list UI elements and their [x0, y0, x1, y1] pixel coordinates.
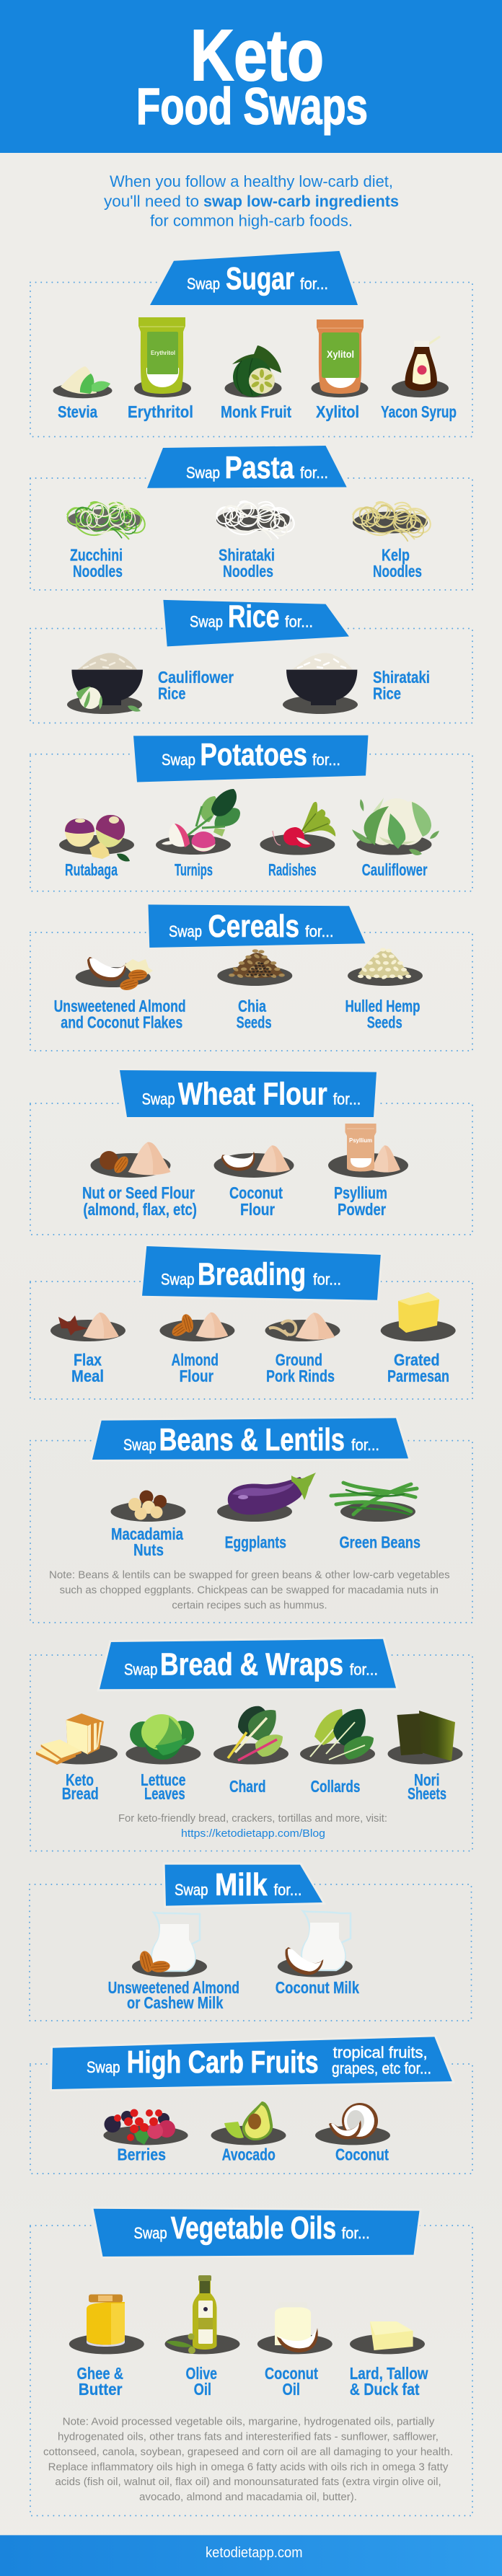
item: shirataki noodles: Shirataki: [219, 546, 275, 565]
item: zucchini noodles: Zucchini: [70, 546, 123, 565]
item: almond or cashew milk: [108, 1913, 239, 2012]
item: lard tallow and duck fat: [350, 2321, 428, 2399]
item: grated parmesan: Grated: [394, 1350, 440, 1369]
item: turnips: Turnips: [175, 860, 213, 879]
item: coconut milk: Coconut Milk: [276, 1978, 359, 1997]
banner: swap high carb fruits: [52, 2037, 452, 2089]
banner: swap rice: [163, 599, 349, 646]
item: nori sheets: Sheets: [408, 1784, 446, 1803]
item: shirataki rice: Shirataki: [373, 668, 430, 687]
item: coconut: [315, 2103, 390, 2164]
item: hulled hemp seeds: Seeds: [367, 1013, 402, 1031]
item: lettuce leaves: Leaves: [144, 1784, 185, 1803]
item: collards: [300, 1709, 375, 1796]
item: macadamia nuts: [111, 1490, 186, 1559]
item: stevia: Stevia: [58, 402, 97, 421]
note: keto friendly bread: https://ketodietapp.com/Blog: [181, 1827, 325, 1840]
intro text: you'll need to: [104, 193, 199, 211]
banner: swap beans and lentils: Beans & Lentils: [159, 1422, 345, 1457]
note: beans and lentils: such as chopped eggplants. Chickpeas can be swapped for macadamia nuts in: [60, 1584, 439, 1597]
panel: sugar: [30, 251, 472, 437]
note: vegetable oils: cottonseed, canola, soybean, grapeseed and corn oil are all damaging to your health.: [43, 2446, 453, 2458]
banner: swap breading: for...: [313, 1271, 341, 1289]
item: keto bread: Keto: [66, 1770, 94, 1789]
item: ground pork rinds: Ground: [276, 1350, 322, 1369]
banner: swap cereals: for...: [305, 922, 333, 940]
item: almond and coconut flakes: and Coconut Flakes: [61, 1013, 182, 1031]
item: grated parmesan: [381, 1292, 456, 1385]
banner: swap milk: Milk: [215, 1867, 268, 1902]
item: nut or seed flour: Nut or Seed Flour: [82, 1183, 195, 1202]
banner: swap milk: Swap: [175, 1881, 208, 1899]
panel: high carb fruits: [30, 2037, 472, 2174]
title: Food Swaps: [136, 79, 368, 136]
item: green beans: Green Beans: [339, 1533, 420, 1552]
item: psyllium powder: [328, 1124, 408, 1219]
item: almond or cashew milk: Unsweetened Almond: [108, 1978, 239, 1997]
banner: swap rice: Rice: [228, 599, 280, 634]
item: hulled hemp seeds: [345, 948, 423, 1031]
banner: swap sugar: Swap: [187, 275, 220, 293]
item: grated parmesan: Parmesan: [387, 1367, 449, 1385]
item: almond flour: Flour: [180, 1367, 213, 1385]
intro text: for common high-carb foods.: [150, 212, 353, 230]
item: coconut flour: Flour: [240, 1200, 275, 1219]
banner: swap high carb fruits: tropical fruits,: [333, 2044, 428, 2062]
item: lettuce leaves: [126, 1714, 201, 1803]
item: shirataki noodles: Noodles: [223, 562, 273, 581]
item: yacon syrup: [381, 337, 457, 421]
item: collards: Collards: [311, 1777, 360, 1796]
item: nori sheets: [388, 1711, 463, 1803]
item: almond and coconut flakes: Unsweetened Almond: [54, 997, 186, 1015]
item: keto bread: Bread: [62, 1784, 99, 1803]
item: ghee and butter: Ghee &: [76, 2364, 123, 2383]
banner: swap potatoes: for...: [312, 751, 340, 769]
item: almond or cashew milk: or Cashew Milk: [127, 1993, 224, 2012]
item: berries: [103, 2109, 188, 2164]
banner: swap cereals: Swap: [169, 922, 202, 940]
item: macadamia nuts: Macadamia: [111, 1525, 183, 1543]
note: keto friendly bread: For keto-friendly bread, crackers, tortillas and more, visit:: [118, 1812, 387, 1825]
banner: swap vegetable oils: for...: [342, 2224, 370, 2242]
item: olive oil: Oil: [194, 2380, 211, 2399]
item: nut or seed flour: [82, 1142, 197, 1219]
intro text: swap low-carb ingredients: [203, 193, 399, 211]
item: coconut milk: [276, 1911, 359, 1997]
banner: swap rice: for...: [285, 612, 313, 630]
item: eggplants: [217, 1473, 316, 1552]
item: shirataki rice: [283, 653, 430, 714]
footer: [0, 2535, 502, 2576]
banner: swap vegetable oils: [94, 2209, 420, 2257]
item: ghee and butter: Butter: [79, 2380, 123, 2399]
banner: swap cereals: Cereals: [208, 909, 299, 944]
item: avocado: Avocado: [222, 2145, 276, 2164]
item: chia seeds: Seeds: [237, 1013, 272, 1031]
item: psyllium powder: Psyllium: [334, 1183, 387, 1202]
item: olive oil: Olive: [186, 2364, 217, 2383]
banner: swap pasta: Pasta: [225, 450, 294, 485]
item: almond flour: Almond: [172, 1350, 219, 1369]
footer: ketodietapp.com: [206, 2545, 303, 2561]
item: coconut: Coconut: [335, 2145, 389, 2164]
banner: swap breading: Breading: [198, 1257, 306, 1292]
item: lard tallow and duck fat: Lard, Tallow: [350, 2364, 428, 2383]
item: coconut oil: Coconut: [265, 2364, 318, 2383]
item: chia seeds: Chia: [238, 997, 266, 1015]
item: nori sheets: Nori: [414, 1770, 440, 1789]
item: keto bread: [36, 1713, 118, 1803]
title: Keto: [190, 15, 324, 96]
banner: swap high carb fruits: High Carb Fruits: [127, 2045, 319, 2080]
banner: swap vegetable oils: Vegetable Oils: [171, 2210, 336, 2246]
item: stevia: [53, 366, 113, 421]
banner: swap high carb fruits: Swap: [87, 2058, 120, 2076]
item: almond flour: [159, 1313, 234, 1385]
item: chia seeds: [217, 949, 292, 1031]
note: vegetable oils: Note: Avoid processed vegetable oils, margarine, hydrogenated oils, partially: [63, 2415, 435, 2427]
item: ground pork rinds: Pork Rinds: [266, 1367, 335, 1385]
note: vegetable oils: avocado, almond and macadamia oil, butter).: [139, 2491, 357, 2503]
item: eggplants: Eggplants: [225, 1533, 286, 1552]
banner: swap beans and lentils: for...: [351, 1436, 379, 1454]
note: vegetable oils: [43, 2415, 453, 2503]
panel: vegetable oils: [30, 2209, 472, 2515]
note: vegetable oils: Replace inflammatory oils high in omega 6 fatty acids with oils rich in omega 3 fatty: [48, 2461, 449, 2474]
item: yacon syrup: Yacon Syrup: [381, 402, 457, 421]
banner: swap sugar: Sugar: [226, 261, 294, 296]
item: rutabaga: Rutabaga: [65, 860, 118, 879]
banner: swap breading: Swap: [161, 1271, 195, 1289]
intro text: When you follow a healthy low-carb diet,: [110, 172, 393, 190]
item: coconut flour: [213, 1145, 294, 1219]
panel: breading: [30, 1246, 472, 1399]
banner: swap beans and lentils: [92, 1418, 408, 1460]
item: cauliflower: Cauliflower: [362, 860, 428, 879]
note: keto friendly bread: [118, 1812, 387, 1840]
intro text: [104, 172, 399, 230]
item: radishes: Radishes: [268, 860, 317, 879]
item: xylitol: [312, 319, 368, 421]
item: cauliflower rice: Rice: [158, 684, 186, 702]
banner: swap milk: for...: [274, 1881, 301, 1899]
item: kelp noodles: Noodles: [373, 562, 422, 581]
item: olive oil: [164, 2275, 239, 2399]
banner: swap potatoes: Swap: [162, 751, 195, 769]
item: lettuce leaves: Lettuce: [141, 1770, 186, 1789]
item: zucchini noodles: [67, 498, 145, 581]
header band: [0, 0, 502, 153]
item: chard: Chard: [229, 1777, 265, 1796]
item: flax meal: Meal: [71, 1367, 104, 1385]
item: coconut oil: [257, 2302, 333, 2399]
item: almond and coconut flakes: [54, 957, 186, 1031]
panel: cereals: [30, 904, 472, 1051]
note: vegetable oils: hydrogenated oils, other trans fats and interesterified fats - sunflower, safflower,: [58, 2431, 439, 2443]
item: lard tallow and duck fat: & Duck fat: [350, 2380, 420, 2399]
item: zucchini noodles: Noodles: [73, 562, 123, 581]
item: psyllium powder: Psyllium: [349, 1137, 372, 1144]
note: beans and lentils: [49, 1569, 450, 1612]
banner: swap pasta: Swap: [186, 464, 220, 482]
item: radishes: [260, 802, 335, 879]
item: erythritol: Erythritol: [151, 350, 175, 356]
item: erythritol: Erythritol: [128, 402, 193, 421]
panel: potatoes: [30, 736, 472, 891]
item: green beans: [331, 1483, 420, 1552]
banner: swap potatoes: [133, 736, 368, 782]
banner: swap cereals: [149, 904, 365, 948]
item: shirataki noodles: [216, 500, 294, 581]
banner: swap sugar: [150, 251, 358, 305]
panel: pasta: [30, 446, 472, 590]
item: coconut oil: Oil: [283, 2380, 300, 2399]
banner: swap breading: [142, 1246, 381, 1300]
item: xylitol: Xylitol: [327, 348, 354, 360]
item: cauliflower: [352, 798, 439, 879]
item: flax meal: [50, 1313, 126, 1385]
panel: wheat flour: [30, 1070, 472, 1235]
item: kelp noodles: [353, 501, 431, 581]
item: macadamia nuts: Nuts: [133, 1540, 164, 1559]
banner: swap rice: Swap: [190, 612, 223, 630]
item: hulled hemp seeds: Hulled Hemp: [345, 997, 420, 1015]
item: rutabaga: [59, 815, 134, 879]
banner: swap high carb fruits: grapes, etc for...: [332, 2059, 431, 2077]
item: cauliflower rice: [67, 653, 234, 714]
panel: beans and lentils: [30, 1418, 472, 1623]
panel: bread and wraps: [30, 1639, 472, 1851]
banner: swap bread and wraps: [100, 1639, 396, 1689]
item: monk fruit: Monk Fruit: [221, 402, 291, 421]
title: [136, 15, 368, 136]
banner: swap wheat flour: Swap: [142, 1090, 175, 1108]
item: shirataki rice: Rice: [373, 684, 401, 702]
banner: swap beans and lentils: Swap: [123, 1436, 157, 1454]
item: ghee and butter: [69, 2295, 144, 2399]
item: avocado: [211, 2101, 286, 2164]
banner: swap milk: [165, 1865, 322, 1906]
banner: swap vegetable oils: Swap: [134, 2224, 167, 2242]
item: chard: [213, 1706, 289, 1796]
item: xylitol: Xylitol: [316, 402, 359, 421]
note: vegetable oils: acids (fish oil, walnut oil, flax oil) and monounsaturated fats (extra virgin olive oil,: [55, 2476, 441, 2488]
banner: swap bread and wraps: for...: [350, 1660, 378, 1679]
item: turnips: [156, 789, 240, 879]
item: ground pork rinds: [265, 1313, 340, 1385]
panel: milk: [30, 1865, 472, 2021]
banner: swap sugar: for...: [300, 275, 328, 293]
item: coconut flour: Coconut: [229, 1183, 283, 1202]
item: erythritol: [128, 317, 193, 421]
item: kelp noodles: Kelp: [382, 546, 410, 565]
item: psyllium powder: Powder: [338, 1200, 386, 1219]
panel: rice: [30, 599, 472, 723]
item: flax meal: Flax: [74, 1350, 102, 1369]
banner: swap potatoes: Potatoes: [200, 737, 307, 772]
banner: swap bread and wraps: Bread & Wraps: [160, 1647, 343, 1682]
item: berries: Berries: [117, 2145, 166, 2164]
banner: swap pasta: [147, 446, 347, 488]
banner: swap wheat flour: for...: [333, 1090, 361, 1108]
banner: swap wheat flour: Wheat Flour: [178, 1076, 327, 1112]
item: cauliflower rice: Cauliflower: [158, 668, 234, 687]
banner: swap pasta: for...: [300, 464, 328, 482]
banner: swap bread and wraps: Swap: [124, 1660, 157, 1679]
item: nut or seed flour: (almond, flax, etc): [83, 1200, 197, 1219]
item: monk fruit: [221, 345, 291, 421]
note: beans and lentils: certain recipes such as hummus.: [172, 1600, 327, 1612]
banner: swap wheat flour: [120, 1070, 376, 1117]
note: beans and lentils: Note: Beans & lentils can be swapped for green beans & other low-carb vegetables: [49, 1569, 450, 1582]
